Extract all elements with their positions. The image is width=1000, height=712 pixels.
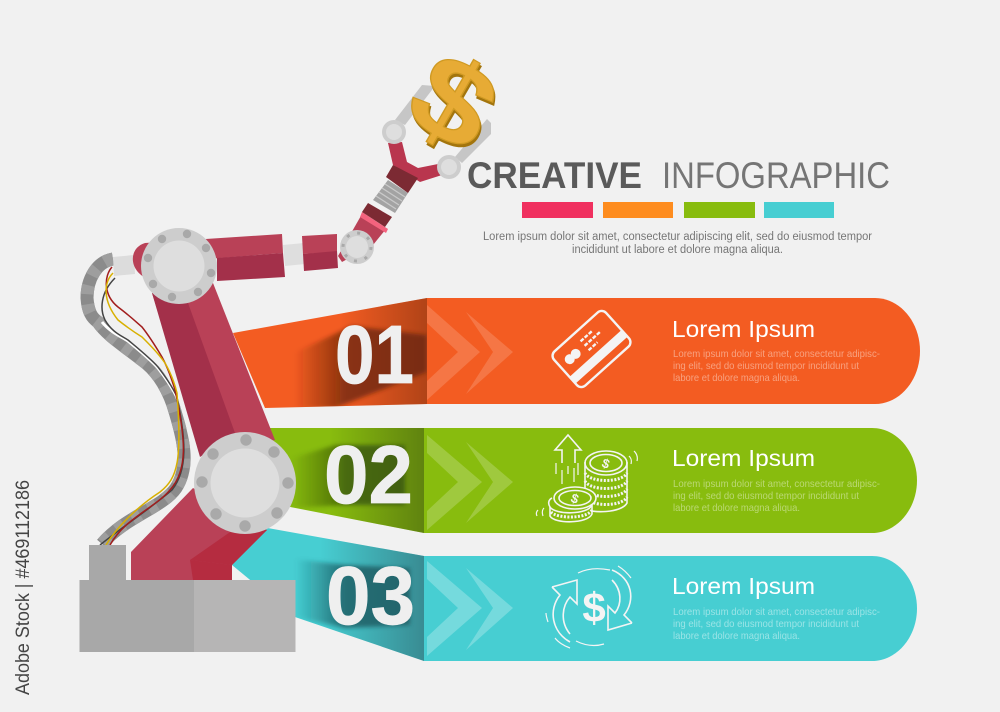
heading 01: Lorem Ipsum [672, 316, 815, 342]
up arrow [555, 435, 581, 463]
body 03 [673, 606, 880, 642]
body 02: ing elit, sed do eiusmod tempor incididunt ut [673, 490, 859, 502]
number 03: 03 [326, 549, 415, 642]
panel 02 [270, 428, 917, 533]
body 03: ing elit, sed do eiusmod tempor incididunt ut [673, 618, 859, 630]
band 02 [424, 428, 917, 533]
chevrons 02 [427, 435, 513, 530]
number shadow 03 [295, 559, 410, 628]
short coin stack: $ [569, 490, 582, 507]
elbow joint [194, 432, 296, 534]
forearm sleeve [302, 234, 338, 271]
wedge 02 [270, 428, 424, 533]
dollar symbol: $ [387, 26, 519, 177]
wrist segment [338, 203, 392, 262]
shoulder joint [141, 228, 217, 304]
stock id: Adobe Stock | #469112186 [12, 480, 34, 695]
title: CREATIVE [467, 155, 642, 196]
cable connector [113, 255, 135, 276]
body 03: Lorem ipsum dolor sit amet, consectetur adipisc- [673, 606, 880, 618]
subtitle: incididunt ut labore et dolore magna aliqua. [572, 244, 783, 256]
number 01: 01 [335, 308, 414, 401]
cable chain [87, 259, 184, 545]
icon: dollar cycle [546, 566, 632, 648]
body 02 [673, 478, 880, 514]
colour bars [522, 202, 834, 218]
motion ticks [536, 451, 637, 516]
wedge 01 [233, 298, 427, 408]
robot arm [80, 26, 519, 652]
number shadow 02 [292, 445, 405, 508]
gripper [382, 85, 491, 193]
tall coin stack: $ [600, 455, 613, 472]
band 01 [427, 298, 920, 404]
icon: coins and arrow [536, 435, 637, 522]
body 03: labore et dolore magna aliqua. [673, 630, 800, 642]
body 01: ing elit, sed do eiusmod tempor incididunt ut [673, 360, 859, 372]
chevrons 03 [427, 561, 513, 656]
body 02: Lorem ipsum dolor sit amet, consectetur adipisc- [673, 478, 880, 490]
forearm [133, 234, 285, 281]
subtitle: Lorem ipsum dolor sit amet, consectetur adipiscing elit, sed do eiusmod tempor [483, 231, 872, 243]
number shadow 01 [296, 326, 427, 408]
subtitle [483, 231, 872, 256]
upper arm [152, 283, 275, 457]
icon: dollar cycle: $ [582, 584, 606, 631]
screw neck [373, 180, 408, 213]
wrist joint [340, 230, 374, 264]
wires [102, 322, 178, 400]
body 01 [673, 348, 880, 384]
panel 01 [233, 298, 920, 408]
body 01: labore et dolore magna aliqua. [673, 372, 800, 384]
band 03 [424, 556, 917, 661]
chevrons 01 [427, 305, 513, 400]
body 02: labore et dolore magna aliqua. [673, 502, 800, 514]
number 02: 02 [324, 428, 413, 521]
body 01: Lorem ipsum dolor sit amet, consectetur adipisc- [673, 348, 880, 360]
heading 03: Lorem Ipsum [672, 573, 815, 599]
forearm connector [283, 243, 305, 266]
base [80, 580, 296, 652]
heading 02: Lorem Ipsum [672, 445, 815, 471]
title [467, 155, 890, 196]
icon: credit card [550, 308, 633, 390]
base riser [89, 545, 126, 580]
wedge 03 [232, 527, 424, 661]
panel 03 [232, 527, 917, 661]
lower arm [131, 488, 267, 580]
title: INFOGRAPHIC [662, 155, 890, 196]
